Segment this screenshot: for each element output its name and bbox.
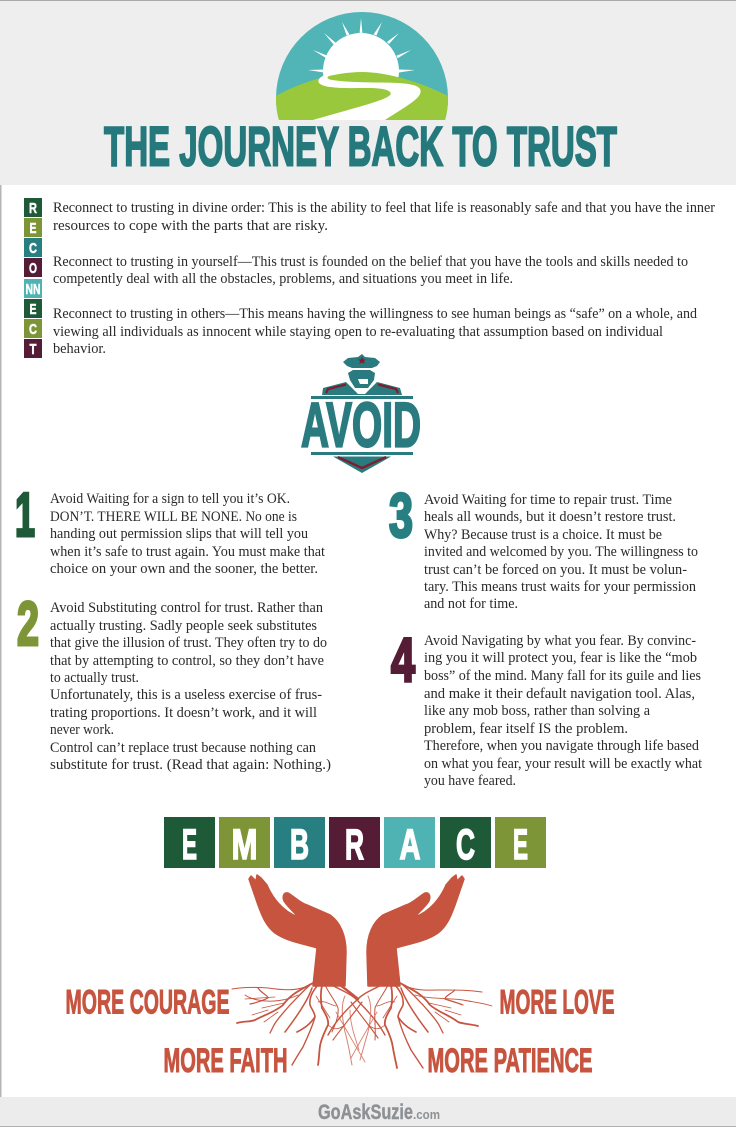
panel: reconnect acrostic: E xyxy=(30,220,36,237)
avoid item 1 text xyxy=(50,491,325,577)
avoid item 2 text: trating proportions. It doesn’t work, and it will xyxy=(50,705,317,721)
icon: open hands with roots xyxy=(232,875,492,1068)
avoid item 3 text: Avoid Waiting for time to repair trust. Time xyxy=(424,492,672,508)
label: more faith: MORE FAITH xyxy=(164,1042,288,1080)
avoid item 3 text: heals all wounds, but it doesn’t restore trust. xyxy=(424,509,676,525)
text block: reconnect to divine order: Reconnect to trusting in divine order: This is the ability to feel that life is reasonably safe and that you have the inner xyxy=(53,200,715,216)
embrace letter tiles: E xyxy=(182,821,197,869)
avoid item 4 text: like any mob boss, rather than solving a xyxy=(424,703,651,719)
avoid item 4 text: problem, fear itself IS the problem. xyxy=(424,721,628,737)
avoid item 4 text: you have feared. xyxy=(424,773,516,789)
numeral 3: 3 xyxy=(389,482,413,551)
avoid item 1 text: choice on your own and the sooner, the better. xyxy=(50,561,318,577)
embrace letter tiles: B xyxy=(290,821,309,869)
avoid item 3 text: Why? Because trust is a choice. It must be xyxy=(424,527,662,543)
text block: reconnect to others: viewing all individuals as innocent while staying open to re-evaluating that assumption based on individual xyxy=(53,324,663,340)
footer brand: GoAskSuzie xyxy=(318,1101,413,1124)
text block: reconnect to others xyxy=(53,306,698,357)
avoid item 2 text: Avoid Substituting control for trust. Rather than xyxy=(50,600,323,616)
panel: reconnect acrostic xyxy=(24,198,42,358)
text block: reconnect to yourself xyxy=(53,254,688,287)
avoid item 4 text: boss” of the mind. Many fall for its guile and lies xyxy=(424,668,701,684)
panel: reconnect acrostic: O xyxy=(29,260,37,277)
header panel xyxy=(0,0,736,185)
label: more patience: MORE PATIENCE xyxy=(428,1042,592,1080)
avoid item 4 text: and make it their default navigation tool. Alas, xyxy=(424,686,695,702)
avoid heading: AVOID xyxy=(301,390,421,460)
avoid item 2 text: Unfortunately, this is a useless exercise of frus- xyxy=(50,687,322,703)
avoid item 3 text: trust can’t be forced on you. It must be volun- xyxy=(424,562,687,578)
avoid item 2 text: Control can’t replace trust because nothing can xyxy=(50,740,316,756)
avoid item 1 text: when it’s safe to trust again. You must make that xyxy=(50,544,325,560)
avoid badge xyxy=(301,354,421,473)
avoid item 2 text: that by attempting to control, so they don’t have xyxy=(50,653,324,669)
footer domain suffix: .com xyxy=(413,1107,440,1122)
panel: reconnect acrostic: R xyxy=(29,200,37,217)
avoid item 2 text: that give the illusion of trust. They often try to do xyxy=(50,635,327,651)
avoid item 4 text: Therefore, when you navigate through life based xyxy=(424,738,700,754)
avoid item 2 text: to actually trust. xyxy=(50,670,139,686)
avoid item 1 text: Avoid Waiting for a sign to tell you it’s OK. xyxy=(50,491,290,507)
embrace letter tiles: C xyxy=(456,821,475,869)
icon: sunrise over a hill with winding road xyxy=(276,12,448,120)
numeral 2: 2 xyxy=(17,590,39,659)
avoid item 2 text: actually trusting. Sadly people seek substitutes xyxy=(50,618,317,634)
avoid item 1 text: DON’T. THERE WILL BE NONE. No one is xyxy=(50,509,297,525)
avoid item 1 text: handing out permission slips that will tell you xyxy=(50,526,308,542)
embrace letter tiles: E xyxy=(513,821,528,869)
footer band xyxy=(0,1097,736,1127)
panel: reconnect acrostic: C xyxy=(29,240,37,257)
avoid item 4 text: Avoid Navigating by what you fear. By convinc- xyxy=(424,633,696,649)
embrace letter tiles: A xyxy=(400,821,420,869)
avoid item 4 text: ing you it will protect you, fear is like the “mob xyxy=(424,650,697,666)
avoid item 4 text: on what you fear, your result will be exactly what xyxy=(424,756,702,772)
avoid item 4 text xyxy=(424,633,702,789)
avoid item 2 text: substitute for trust. (Read that again: Nothing.) xyxy=(50,757,331,773)
numeral 4: 4 xyxy=(391,626,415,695)
text block: reconnect to divine order: resources to cope with the parts that are risky. xyxy=(53,218,328,234)
panel: reconnect acrostic: C xyxy=(29,321,37,338)
text block: reconnect to yourself: Reconnect to trusting in yourself—This trust is founded on the belief that you have the tools and skills needed to xyxy=(53,254,688,270)
text block: reconnect to others: Reconnect to trusting in others—This means having the willingness to see human beings as “safe” on a whole, and xyxy=(53,306,698,322)
panel: reconnect acrostic: T xyxy=(30,341,36,358)
panel: reconnect acrostic: NN xyxy=(26,281,40,298)
icon: police officer xyxy=(311,354,413,473)
avoid item 2 text xyxy=(50,600,331,773)
numeral 1: 1 xyxy=(15,481,35,550)
label: more courage: MORE COURAGE xyxy=(66,984,230,1022)
label: more love: MORE LOVE xyxy=(500,984,614,1022)
panel: reconnect acrostic: E xyxy=(30,301,36,318)
text block: reconnect to others: behavior. xyxy=(53,341,106,357)
embrace letter tiles: M xyxy=(232,821,258,869)
avoid item 2 text: never work. xyxy=(50,722,114,738)
avoid item 3 text: tary. This means trust waits for your permission xyxy=(424,579,696,595)
avoid item 3 text xyxy=(424,492,698,612)
avoid item 3 text: invited and welcomed by you. The willingness to xyxy=(424,544,698,560)
avoid item 3 text: and not for time. xyxy=(424,596,518,612)
text block: reconnect to yourself: competently deal with all the obstacles, problems, and situations you meet in life. xyxy=(53,271,513,287)
text block: reconnect to divine order xyxy=(53,200,715,234)
embrace letter tiles: R xyxy=(345,821,364,869)
embrace letter tiles xyxy=(164,817,546,869)
